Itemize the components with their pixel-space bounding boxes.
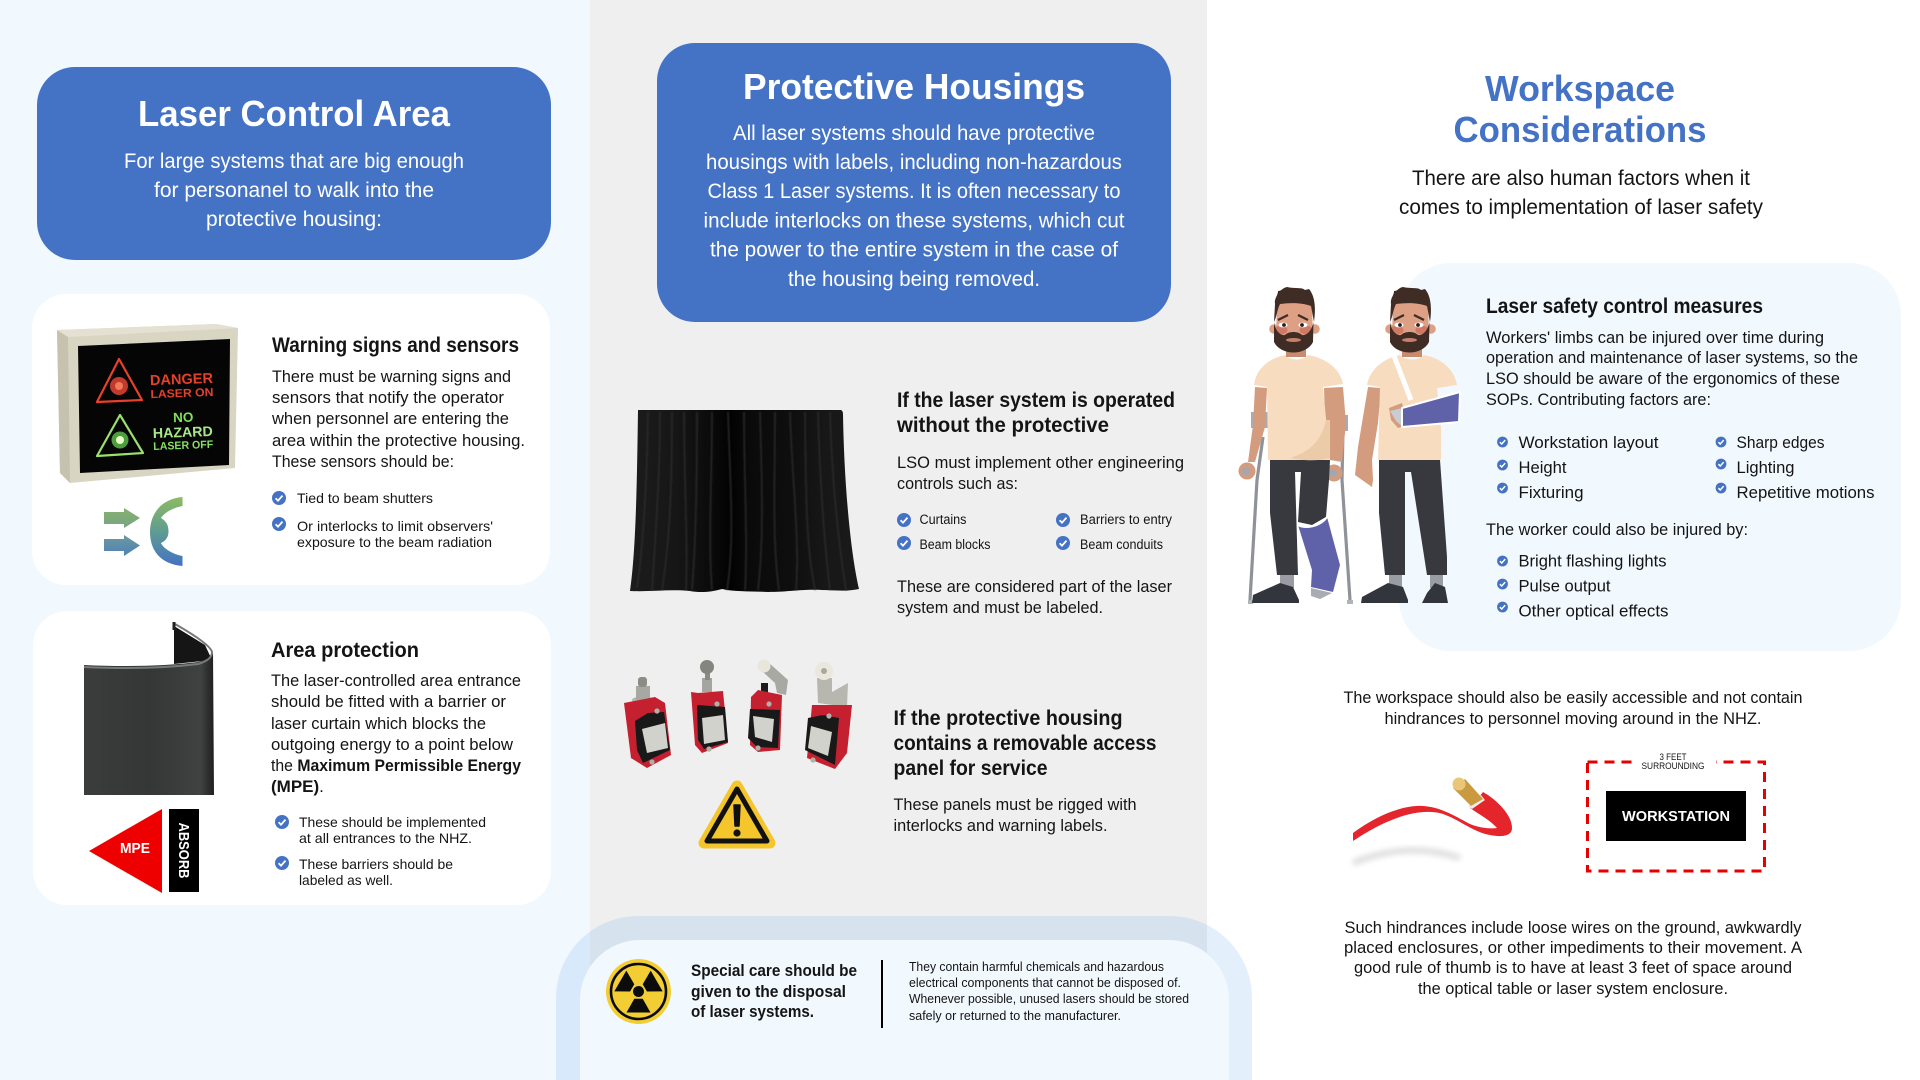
checklist: Beam blocks: [920, 537, 991, 552]
checklist: Beam conduits: [1080, 537, 1163, 552]
heading: operated without the protective: without the protective: [896, 413, 1109, 437]
text: hindrances: Such hindrances include loose wires on the ground, awkwardly: [1344, 918, 1802, 937]
background: middle column: [590, 0, 1207, 1080]
callout heading: of laser systems.: [691, 1002, 814, 1021]
body text: when personnel are entering the: [271, 409, 509, 428]
background: left column: [0, 0, 590, 1080]
heading: workspace considerations: [1454, 68, 1706, 150]
body text: LSO should be aware of the ergonomics of these: [1486, 369, 1840, 388]
checklist: other injuries: Bright flashing lights: [1518, 552, 1666, 570]
diagram: workstation clearance: WORKSTATION: [1622, 808, 1730, 825]
heading: laser control area: Laser Control Area: [138, 93, 451, 134]
heading: laser safety control measures: Laser safety control measures: [1486, 295, 1763, 318]
image: laser curtain: [84, 622, 214, 795]
callout text: [909, 959, 1189, 1023]
checklist: Curtains: [920, 512, 967, 527]
text: workspace accessibility: [1344, 688, 1802, 728]
body text: The laser-controlled area entrance: [271, 671, 521, 690]
text: hindrances: [1344, 918, 1803, 998]
callout text: They contain harmful chemicals and hazardous: [909, 959, 1164, 974]
body text: laser curtain which blocks the: [271, 714, 486, 733]
callout heading: Special care should be: [691, 961, 857, 980]
body text: (MPE).: [271, 777, 324, 796]
body text: LSO must implement other engineering: [897, 453, 1184, 472]
image: laser warning sign: LASER ON: [150, 387, 214, 401]
diagram: workstation clearance: [1588, 752, 1764, 871]
heading: workspace considerations: Considerations: [1454, 109, 1706, 150]
image: black curtain: [630, 410, 859, 592]
closing text: [897, 577, 1172, 617]
callout heading: [691, 961, 857, 1021]
diagram: MPE absorbed: MPE: [120, 840, 150, 857]
checklist: contributing factors: Repetitive motions: [1736, 483, 1874, 502]
panel: warning signs and sensors: [32, 294, 550, 585]
intro text: the housing being removed.: [788, 267, 1040, 291]
intro text: [124, 149, 464, 231]
heading: protective housings: Protective Housings: [743, 66, 1085, 107]
body text: Workers' limbs can be injured over time during: [1486, 328, 1824, 347]
figure: worker with crutches and leg cast: [1238, 287, 1353, 604]
heading: removable access panel: panel for service: [894, 756, 1048, 780]
body text: These panels must be rigged with: [894, 795, 1136, 814]
checklist: Barriers to entry: [1080, 512, 1172, 527]
text: hindrances: good rule of thumb is to have at least 3 feet of space around: [1354, 958, 1792, 977]
section: removable access panel: [624, 660, 1157, 843]
intro text: include interlocks on these systems, which cut: [704, 208, 1125, 232]
text: worker could also be injured: The worker could also be injured by:: [1486, 520, 1748, 539]
body text: should be fitted with a barrier or: [271, 692, 506, 711]
workspace intro text: [1399, 167, 1763, 219]
text: hindrances: the optical table or laser system enclosure.: [1418, 979, 1728, 998]
checklist: [897, 512, 1172, 552]
panel: disposal callout: [556, 916, 1252, 1080]
intro text: for personanel to walk into the: [154, 178, 434, 202]
diagram: workstation clearance: 3 FEET: [1660, 752, 1687, 763]
heading: area protection: Area protection: [271, 639, 419, 662]
body text: SOPs. Contributing factors are:: [1486, 390, 1711, 409]
checklist: Tied to beam shutters: [297, 490, 433, 506]
intro text: Class 1 Laser systems. It is often necessary to: [708, 179, 1121, 203]
body text: [897, 453, 1184, 493]
checklist: [272, 490, 493, 550]
checklist: labeled as well.: [299, 872, 393, 888]
checklist: contributing factors: Height: [1518, 458, 1567, 477]
heading: warning signs and sensors: Warning signs and sensors: [272, 334, 519, 357]
body text: interlocks and warning labels.: [894, 816, 1108, 835]
illustration: injured workers: [1238, 287, 1460, 604]
icon: arrows and beam shutter: [104, 497, 182, 566]
workspace intro text: There are also human factors when it: [1412, 167, 1750, 190]
section: operated without housing: [630, 388, 1184, 617]
intro text: protective housing:: [206, 207, 382, 231]
text: workspace accessibility: hindrances to personnel moving around in the NHZ.: [1384, 709, 1762, 728]
body text: [271, 671, 521, 796]
body text: There must be warning signs and: [272, 367, 511, 386]
heading: workspace considerations: Workspace: [1485, 68, 1675, 109]
figure: worker with arm sling: [1355, 287, 1460, 603]
text: hindrances: placed enclosures, or other impediments to their movement. A: [1344, 938, 1803, 957]
panel: laser control area header: [37, 67, 551, 260]
icon: warning triangle: [704, 786, 770, 843]
body text: outgoing energy to a point below: [271, 735, 514, 754]
heading: removable access panel: [894, 706, 1157, 780]
checklist: Or interlocks to limit observers': [297, 518, 493, 534]
callout text: safely or returned to the manufacturer.: [909, 1008, 1121, 1023]
body text: sensors that notify the operator: [272, 388, 504, 407]
body text: controls such as:: [897, 474, 1018, 493]
intro text: All laser systems should have protective: [733, 121, 1095, 145]
diagram: MPE absorbed: ABSORB: [175, 822, 191, 878]
checklist: other injuries: Pulse output: [1518, 576, 1611, 596]
image: laser warning sign: DANGER: [150, 371, 214, 389]
panel: laser safety control measures: [1238, 263, 1901, 651]
image: laser warning sign: [57, 324, 238, 483]
image: interlock switches: [624, 660, 852, 769]
checklist: These should be implemented: [299, 814, 486, 830]
intro text: For large systems that are big enough: [124, 149, 464, 173]
image: laser warning sign: LASER OFF: [153, 439, 214, 453]
workspace intro text: comes to implementation of laser safety: [1399, 196, 1763, 219]
checklist: contributing factors: Sharp edges: [1736, 433, 1824, 452]
body text: These sensors should be:: [272, 452, 454, 471]
checklist: other injuries: [1497, 552, 1668, 620]
intro text: the power to the entire system in the case of: [710, 238, 1118, 262]
checklist: exposure to the beam radiation: [297, 534, 492, 550]
body text: operation and maintenance of laser systems, so the: [1486, 348, 1858, 367]
panel: protective housings header: [657, 43, 1171, 322]
heading: operated without the protective: If the laser system is operated: [897, 388, 1175, 412]
checklist: contributing factors: Lighting: [1736, 458, 1794, 477]
callout text: electrical components that cannot be disposed of.: [909, 975, 1181, 990]
image: laser warning sign: HAZARD: [153, 423, 213, 441]
checklist: other injuries: Other optical effects: [1518, 602, 1668, 620]
checklist: contributing factors: [1497, 433, 1874, 502]
body text: [1486, 328, 1858, 409]
closing text: These are considered part of the laser: [897, 577, 1172, 596]
heading: removable access panel: If the protective housing: [894, 706, 1122, 730]
text: workspace accessibility: The workspace should also be easily accessible and not contain: [1344, 688, 1802, 707]
callout heading: given to the disposal: [691, 982, 846, 1001]
heading: removable access panel: contains a removable access: [894, 731, 1157, 755]
body text: [271, 367, 525, 471]
diagram: MPE absorbed: [89, 809, 199, 893]
checklist: at all entrances to the NHZ.: [299, 830, 472, 846]
intro text: housings with labels, including non-hazardous: [706, 150, 1122, 174]
icon: radiation symbol: [606, 959, 671, 1024]
checklist: contributing factors: Workstation layout: [1518, 433, 1659, 452]
checklist: [275, 814, 486, 888]
divider: [881, 960, 883, 1028]
body text: [894, 795, 1136, 835]
intro text: [704, 121, 1125, 291]
image: laser warning sign: NO: [173, 410, 194, 425]
closing text: system and must be labeled.: [897, 598, 1103, 617]
heading: operated without the protective: [896, 388, 1175, 437]
body text: area within the protective housing.: [272, 431, 525, 450]
panel: area protection: [33, 611, 551, 905]
body text: the Maximum Permissible Energy: [271, 756, 521, 775]
callout text: Whenever possible, unused lasers should be stored: [909, 991, 1189, 1006]
checklist: These barriers should be: [299, 856, 453, 872]
checklist: contributing factors: Fixturing: [1518, 483, 1584, 502]
image: loose red wire: [1353, 778, 1512, 863]
diagram: workstation clearance: SURROUNDING: [1642, 761, 1704, 772]
